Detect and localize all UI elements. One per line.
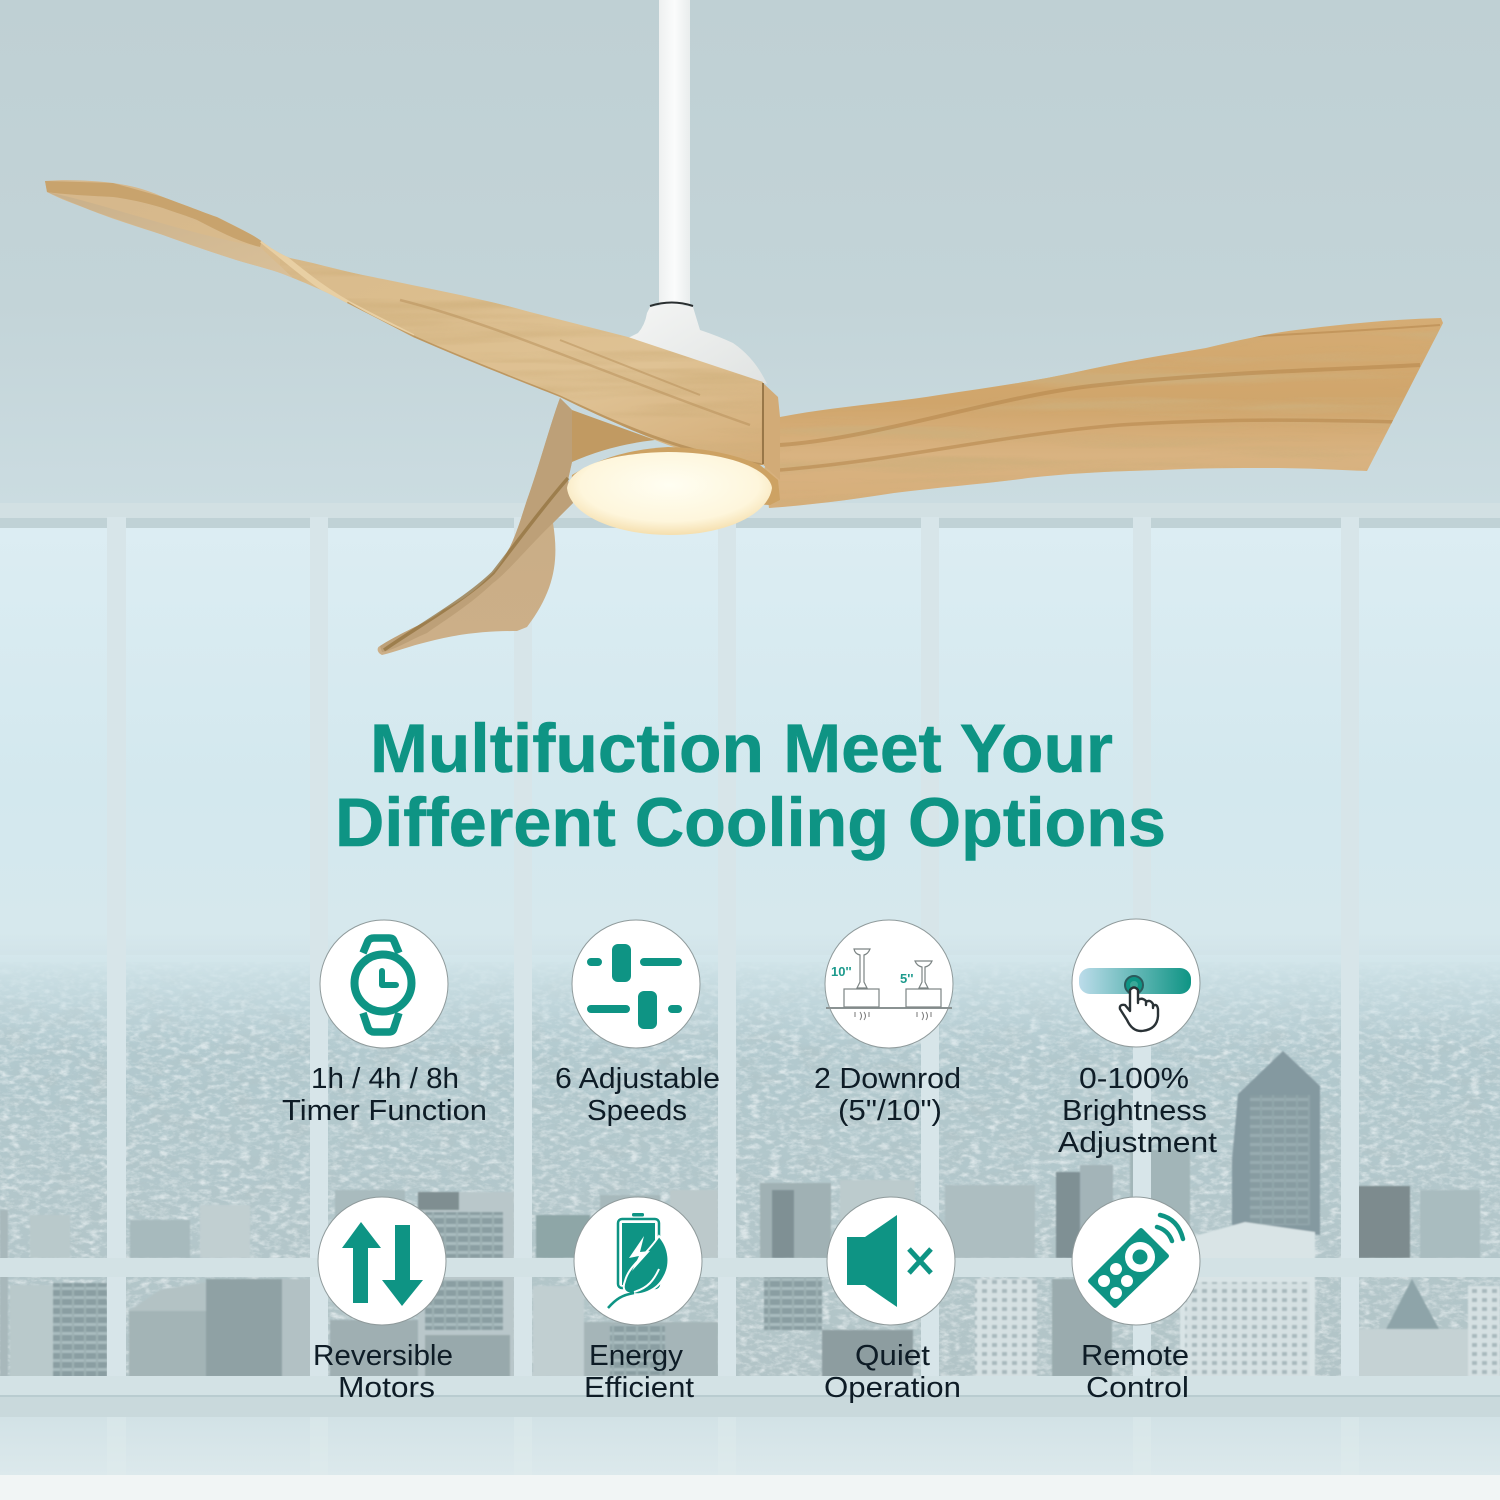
motor housing [628,302,767,384]
blade: right [760,310,1460,510]
label: quiet: Quiet [855,1340,930,1372]
label: downrod: 2 Downrod [814,1063,961,1095]
window mid rail [0,1258,1500,1277]
label: brightness: Brightness [1062,1095,1207,1127]
label: quiet [824,1340,961,1404]
feature: quiet [824,1197,961,1404]
label: brightness: 0-100% [1079,1063,1189,1095]
icon: downrod diagram [825,920,953,1048]
feature: downrod [814,920,961,1127]
label: reversible: Motors [338,1372,435,1404]
label: timer [282,1063,487,1127]
icon: downrod diagram: 5'' [900,971,913,986]
label: quiet: Operation [824,1372,961,1404]
feature: energy [574,1197,702,1404]
blade: lower left [378,398,573,655]
label: downrod: (5"/10") [838,1095,942,1127]
feature: speeds [555,920,720,1127]
floor [0,1417,1500,1500]
label: downrod [814,1063,961,1127]
icon: brightness slider and hand [1072,919,1200,1047]
window sill [0,1376,1500,1417]
label: speeds: Speeds [587,1095,687,1127]
blade: upper left [45,180,770,470]
ceiling [0,0,1500,503]
window top beam [0,503,1500,528]
label: remote [1081,1340,1189,1404]
label: remote: Remote [1081,1340,1189,1372]
feature: brightness [1058,919,1217,1159]
light dome [567,447,780,535]
icon: battery leaf [574,1197,702,1325]
label: brightness [1058,1063,1217,1159]
hub side panel [760,383,780,480]
label: timer: Timer Function [282,1095,487,1127]
title: Multifuction Meet Your [370,710,1113,787]
label: energy: Energy [589,1340,684,1372]
label: brightness: Adjustment [1058,1127,1217,1159]
label: energy: Efficient [584,1372,694,1404]
icon: up and down arrows [318,1197,446,1325]
feature: timer [282,920,487,1127]
label: speeds: 6 Adjustable [555,1063,720,1095]
feature: reversible [313,1197,453,1404]
city panorama [0,955,1500,1377]
icon: downrod diagram: 10'' [831,964,852,979]
icon: sliders [572,920,700,1048]
label: reversible: Reversible [313,1340,453,1372]
title [335,710,1166,861]
title: Different Cooling Options [335,784,1166,861]
label: remote: Control [1086,1372,1189,1404]
downrod [659,0,690,305]
icon: watch [320,920,448,1048]
label: energy [584,1340,694,1404]
label: timer: 1h / 4h / 8h [311,1063,459,1095]
icon: muted speaker [827,1197,955,1325]
window mullions [107,517,1359,1397]
feature: remote [1072,1197,1200,1404]
label: reversible [313,1340,453,1404]
blade fold shading [380,398,573,652]
ceiling fan [45,0,1460,655]
label: speeds [555,1063,720,1127]
icon: remote control [1072,1197,1200,1325]
window sky [0,528,1500,968]
